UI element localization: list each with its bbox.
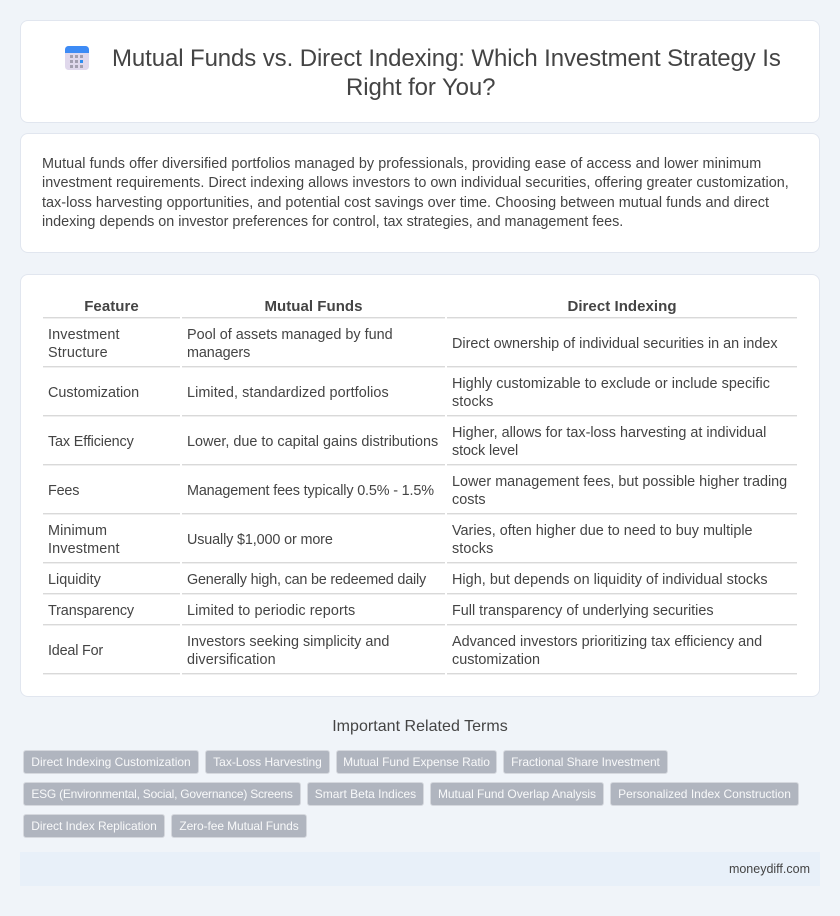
row: fees: Lower management fees, but possible higher trading: [452, 474, 787, 490]
row: tax efficiency: Lower, due to capital gains distributions: [187, 434, 438, 450]
row: liquidity: Generally high, can be redeemed daily: [187, 572, 426, 588]
row: minimum investment: Investment: [48, 541, 120, 557]
panel: comparison table: [20, 274, 820, 697]
row: transparency: Transparency: [48, 603, 134, 619]
tag: [610, 782, 799, 806]
title: Right for You?: [346, 74, 495, 101]
row: fees: Fees: [48, 483, 79, 499]
row: transparency: Full transparency of underlying securities: [452, 603, 714, 619]
tag: Fractional Share Investment: [511, 755, 660, 769]
footer: [20, 852, 820, 886]
tag: [307, 782, 424, 806]
row: investment structure: Pool of assets managed by fund: [187, 327, 393, 343]
row: ideal for: diversification: [187, 652, 276, 668]
row: tax efficiency: Tax Efficiency: [48, 434, 134, 450]
row: customization: stocks: [452, 394, 493, 410]
row: ideal for: customization: [452, 652, 540, 668]
row: ideal for: Advanced investors prioritizing tax efficiency and: [452, 634, 762, 650]
row: investment structure: Direct ownership of individual securities in an index: [452, 336, 778, 352]
row: minimum investment: Usually $1,000 or more: [187, 532, 333, 548]
tag: Tax-Loss Harvesting: [213, 755, 322, 769]
row: liquidity: Liquidity: [48, 572, 101, 588]
title: [112, 45, 781, 101]
row: fees: Management fees typically 0.5% - 1.5%: [187, 483, 434, 499]
footer source text: moneydiff.com: [729, 862, 810, 876]
text block: introduction: Mutual funds offer diversified portfolios managed by professionals, providing ease of access and lower minimum: [42, 156, 761, 172]
panel: introduction: [20, 133, 820, 253]
row: tax efficiency: stock level: [452, 443, 518, 459]
tag: Smart Beta Indices: [315, 787, 416, 801]
text block: introduction: indexing depends on investor preferences for control, tax strategies, and management fees.: [42, 214, 623, 230]
row: investment structure: managers: [187, 345, 250, 361]
row: minimum investment: Varies, often higher due to need to buy multiple: [452, 523, 753, 539]
tag: Direct Index Replication: [31, 819, 157, 833]
tag: Personalized Index Construction: [618, 787, 791, 801]
text block: introduction: investment requirements. Direct indexing allows investors to own individual securities, offering greater customization,: [42, 175, 789, 191]
heading: related terms: Important Related Terms: [332, 718, 508, 735]
tag: [430, 782, 604, 806]
tag: Direct Indexing Customization: [31, 755, 191, 769]
text block: introduction: tax-loss harvesting opportunities, and potential cost savings over time. Choosing between mutual funds and direct: [42, 195, 769, 211]
tag: Mutual Fund Overlap Analysis: [438, 787, 596, 801]
row: customization: Limited, standardized portfolios: [187, 385, 389, 401]
tag: [205, 750, 330, 774]
tag: [171, 814, 307, 838]
tag: Mutual Fund Expense Ratio: [343, 755, 490, 769]
tag: [503, 750, 668, 774]
title: Mutual Funds vs. Direct Indexing: Which Investment Strategy Is: [112, 45, 781, 72]
tag: [23, 814, 165, 838]
row: investment structure: Structure: [48, 345, 108, 361]
tag: [23, 782, 301, 806]
row: ideal for: Ideal For: [48, 643, 103, 659]
table header: Direct Indexing: [567, 298, 677, 315]
table header: Feature: [84, 298, 139, 315]
tag: [23, 750, 199, 774]
row: liquidity: High, but depends on liquidity of individual stocks: [452, 572, 768, 588]
text block: introduction: [42, 156, 789, 230]
row: minimum investment: stocks: [452, 541, 493, 557]
row: investment structure: Investment: [48, 327, 120, 343]
row: customization: Highly customizable to exclude or include specific: [452, 376, 770, 392]
tag: [336, 750, 497, 774]
panel: title header: [20, 20, 820, 123]
row: minimum investment: Minimum: [48, 523, 107, 539]
row: ideal for: Investors seeking simplicity and: [187, 634, 389, 650]
tag: Zero-fee Mutual Funds: [179, 819, 299, 833]
row: fees: costs: [452, 492, 486, 508]
row: tax efficiency: Higher, allows for tax-loss harvesting at individual: [452, 425, 766, 441]
table header: Mutual Funds: [264, 298, 363, 315]
row: customization: Customization: [48, 385, 139, 401]
icon: calendar: [65, 46, 89, 70]
row: transparency: Limited to periodic reports: [187, 603, 355, 619]
tag: ESG (Environmental, Social, Governance) Screens: [31, 787, 293, 801]
